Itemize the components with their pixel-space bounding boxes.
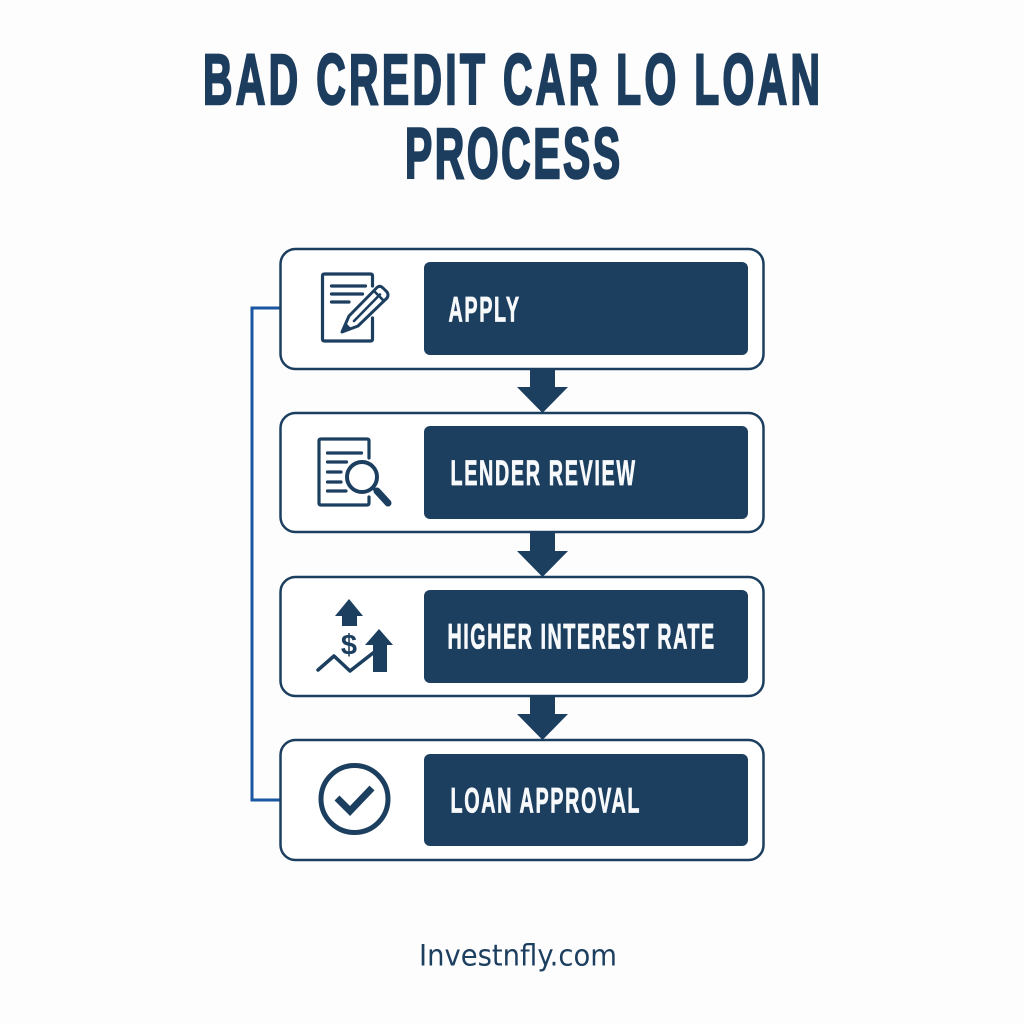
button: lender review xyxy=(424,426,748,519)
arrow: apply to lender review xyxy=(517,369,568,413)
panel: lender review xyxy=(280,413,764,532)
feedback connector line xyxy=(252,308,280,800)
title xyxy=(203,41,820,194)
title: PROCESS xyxy=(405,115,620,194)
icon: check mark in circle xyxy=(321,766,388,832)
icon: document with magnifier xyxy=(319,439,388,505)
panel: higher interest rate xyxy=(280,577,764,696)
button: lender review: LENDER REVIEW xyxy=(450,454,635,494)
icon: dollar and rising arrows: $ xyxy=(341,630,357,662)
button: loan approval: LOAN APPROVAL xyxy=(450,782,639,821)
arrow: lender review to higher interest rate xyxy=(517,532,568,577)
arrow: higher interest rate to loan approval xyxy=(517,696,568,740)
footer website: Investnfly.com xyxy=(419,938,617,972)
button: higher interest rate: HIGHER INTEREST RATE xyxy=(448,618,714,657)
panel: apply xyxy=(280,249,764,369)
button: loan approval xyxy=(424,754,748,846)
title: BAD CREDIT CAR LO LOAN xyxy=(203,41,820,120)
button: apply: APPLY xyxy=(448,291,519,330)
icon: dollar and rising arrows xyxy=(318,599,393,672)
icon: document with pencil xyxy=(322,274,388,341)
button: higher interest rate xyxy=(424,590,748,683)
panel: loan approval xyxy=(280,740,764,860)
button: apply xyxy=(424,262,748,355)
